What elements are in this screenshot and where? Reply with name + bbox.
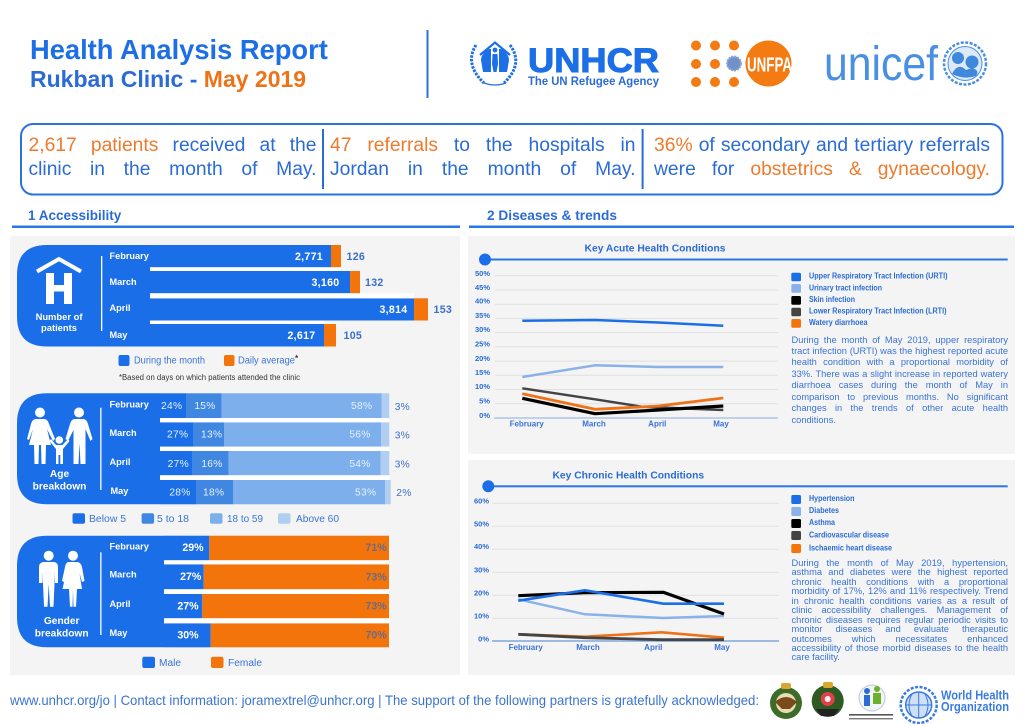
chart: number of patients: 2,617 [287, 330, 316, 342]
chart: key acute health conditions: February [510, 420, 544, 429]
logo: Jordan emblem two [812, 682, 844, 717]
chart: gender breakdown: February [110, 541, 150, 551]
chart: age breakdown: 54% [349, 459, 371, 470]
chart: gender breakdown: May [110, 628, 128, 638]
logo: partner organisation [849, 685, 893, 719]
chart: gender breakdown: breakdown [35, 628, 89, 639]
chart: key chronic health conditions: April [644, 643, 662, 652]
text block: acute analysis: conditions. [792, 415, 836, 425]
chart: gender breakdown: 29% [182, 542, 204, 554]
chart: key chronic health conditions: Key Chronic Health Conditions [552, 471, 704, 482]
chart: key chronic health conditions: 30% [474, 566, 489, 574]
chart: number of patients [17, 245, 452, 346]
legend: gender: Male [159, 658, 181, 669]
text block: chronic analysis [792, 558, 1008, 662]
chart: number of patients: April [110, 303, 130, 313]
chart: key acute health conditions: Key Acute Health Conditions [585, 244, 726, 254]
logo: UNFPA [691, 40, 792, 87]
chart: age breakdown: 18% [203, 488, 224, 499]
chart: key acute health conditions: 15% [475, 368, 490, 377]
chart: gender breakdown: 27% [177, 600, 199, 612]
chart: age breakdown: 24% [161, 401, 182, 412]
title: Health Analysis Report [30, 34, 328, 65]
text block: patients received: clinic in the month of May. [28, 158, 316, 180]
chart: key acute health conditions: 40% [475, 296, 490, 306]
legend: age: 18 to 59 [227, 514, 263, 525]
heading: diseases: 2 Diseases & trends [487, 208, 617, 223]
text block: acute analysis: 33%. There was a slight increase in reported watery [792, 369, 1008, 379]
chart: key acute health conditions: May [713, 420, 729, 429]
chart: age breakdown: 13% [201, 430, 222, 441]
chart: number of patients: 153 [434, 304, 452, 316]
text block: chronic analysis: asthma and diabetes were the highest reported [792, 567, 1008, 577]
chart: gender breakdown: 73% [365, 600, 387, 612]
legend: chronic [791, 494, 892, 553]
legend: age: Above 60 [296, 514, 339, 525]
legend: chronic: Asthma [809, 518, 835, 527]
legend: age: Below 5 [89, 514, 126, 525]
text block: acute analysis: changes in the trends of other acute health [792, 403, 1008, 413]
chart: number of patients: 105 [344, 330, 362, 342]
chart: number of patients: 132 [365, 277, 384, 289]
chart: key acute health conditions: 30% [475, 325, 490, 334]
text block: acute analysis: diarrhoea cases during the month of May in [792, 380, 1008, 390]
chart: gender breakdown: Gender [44, 616, 80, 627]
chart: age breakdown: May [110, 486, 129, 496]
chart: number of patients: February [110, 251, 150, 261]
panel: chronic [468, 460, 1015, 675]
chart: age breakdown: 53% [355, 488, 376, 499]
heading: accessibility: 1 Accessibility [28, 208, 122, 223]
text block: obstetrics share: were for obstetrics & gynaecology. [654, 158, 990, 180]
chart: key acute health conditions: 45% [475, 283, 490, 292]
legend: patients: *Based on days on which patients attended the clinic [119, 373, 300, 382]
chart: age breakdown: 15% [194, 401, 216, 412]
chart: age breakdown: 16% [201, 459, 223, 470]
chart: key acute health conditions: 25% [475, 340, 490, 348]
logo: World Health Organization: World Health [941, 687, 1009, 702]
chart: key chronic health conditions: March [576, 643, 600, 652]
chart: age breakdown: 3% [395, 430, 410, 442]
logo: UNFPA: UNFPA [747, 55, 792, 77]
chart: key acute health conditions: 20% [475, 354, 490, 363]
chart: key chronic health conditions: 50% [474, 520, 489, 528]
callout: key figures box [21, 124, 1002, 194]
chart: number of patients: 126 [346, 251, 365, 263]
text block: chronic analysis: morbidity of 17%, 12% and 11% respectively. Trend [792, 586, 1008, 596]
text block: acute analysis: comparison to previous months. No significant [792, 392, 1008, 402]
chart: number of patients: 3,814 [379, 304, 408, 316]
legend: patients [118, 354, 300, 382]
legend: gender: Female [228, 658, 262, 669]
chart: number of patients: patients [41, 322, 77, 333]
legend: acute: Urinary tract infection [809, 284, 882, 292]
legend: gender [142, 657, 262, 669]
chart: age breakdown: 3% [395, 460, 410, 470]
legend: acute: Upper Respiratory Tract Infection (URTI) [809, 272, 948, 280]
text block: obstetrics share [654, 134, 990, 180]
chart: age breakdown: 27% [167, 430, 188, 441]
text block: chronic analysis: During the month of May 2019, hypertension, [792, 558, 1008, 568]
text block: chronic analysis: care facility. [792, 652, 840, 662]
legend: acute [791, 272, 948, 328]
legend: age [72, 513, 339, 525]
text block: obstetrics share: 36% of secondary and tertiary referrals [654, 134, 990, 156]
chart: age breakdown: March [110, 428, 137, 438]
logo: UNHCR: UNHCR [528, 42, 659, 80]
logo: unicef: unicef [824, 38, 939, 91]
chart: age breakdown: 56% [349, 430, 371, 441]
chart: age breakdown: 2% [396, 488, 412, 499]
chart: key acute health conditions: April [648, 420, 666, 429]
legend: chronic: Cardiovascular disease [809, 531, 889, 540]
text block: acute analysis: tract infection (URTI) was the highest reported acute [792, 346, 1008, 356]
chart: key acute health conditions: 5% [479, 396, 490, 406]
chart: key chronic health conditions: 40% [474, 542, 489, 551]
chart: gender breakdown: 73% [365, 572, 387, 584]
icon: house [37, 259, 81, 304]
chart: gender breakdown: 30% [177, 630, 199, 642]
chart: key acute health conditions: 10% [475, 382, 490, 391]
footer contact text: www.unhcr.org/jo | Contact information: joramextrel@unhcr.org | The support of the following partners is gratefully acknowledged: [9, 692, 759, 708]
text block: chronic analysis: chronic diseases requires regular periodic visits to [792, 615, 1008, 625]
chart: gender breakdown: April [110, 599, 130, 609]
logo: Jordan emblem one [770, 683, 802, 719]
logo: World Health Organization [901, 687, 1009, 723]
legend: patients: Daily average [238, 356, 295, 366]
chart: gender breakdown: March [110, 570, 137, 580]
title: Rukban Clinic - May 2019 [30, 66, 306, 92]
icon: family [27, 408, 92, 464]
chart: age breakdown: 3% [395, 402, 410, 413]
legend: acute: Lower Respiratory Tract Infection (LRTI) [809, 306, 947, 316]
legend: acute: Watery diarrhoea [809, 318, 868, 327]
chart: key acute health conditions: 50% [475, 269, 490, 278]
text block: chronic analysis: in chronic health conditions varies as a result of [792, 596, 1008, 606]
text block: chronic analysis: outcomes which necessitates enhanced [792, 634, 1008, 644]
legend: patients: * [295, 354, 299, 363]
chart: age breakdown: February [110, 400, 150, 410]
chart: age breakdown [17, 393, 412, 504]
text block: acute analysis: During the month of May 2019, upper respiratory [792, 334, 1008, 344]
text block: patients received [28, 134, 317, 180]
text block: chronic analysis: chronic health conditions with a proportional [792, 577, 1008, 587]
legend: age: 5 to 18 [157, 514, 189, 525]
chart: number of patients: March [110, 277, 137, 287]
chart: key acute health conditions: March [582, 420, 606, 429]
text block: chronic analysis: monitor diseases and evaluate therapeutic [792, 624, 1008, 634]
chart: age breakdown: 27% [168, 459, 189, 470]
chart: age breakdown: 58% [351, 401, 372, 412]
chart: key chronic health conditions: May [714, 643, 730, 652]
text block: referrals: 47 referrals to the hospitals in [330, 134, 636, 156]
chart: number of patients: Number of [36, 311, 83, 322]
text block: acute analysis: health condition with a proportional morbidity of [792, 357, 1008, 367]
logo: World Health Organization: Organization [941, 699, 1009, 714]
logo: UNHCR [472, 42, 660, 88]
chart: number of patients: May [110, 330, 128, 340]
chart: age breakdown: breakdown [33, 481, 86, 492]
legend: chronic: Diabetes [809, 506, 839, 515]
chart: key chronic health conditions: 10% [474, 612, 489, 620]
chart: age breakdown: April [110, 457, 130, 467]
text block: referrals [330, 134, 636, 180]
chart: gender breakdown: 71% [365, 542, 387, 554]
chart: gender breakdown: 27% [180, 571, 202, 583]
chart: number of patients: 2,771 [295, 251, 323, 263]
text block: chronic analysis: accessibility of those morbid diseases to the health [792, 643, 1008, 653]
legend: chronic: Hypertension [809, 494, 855, 503]
chart: age breakdown: 28% [169, 488, 191, 499]
title [30, 34, 328, 92]
chart: key chronic health conditions [474, 471, 1008, 652]
legend: acute: Skin infection [809, 295, 855, 304]
chart: number of patients: 3,160 [311, 277, 340, 289]
text block: acute analysis [792, 334, 1008, 425]
chart: key acute health conditions [475, 244, 1008, 429]
chart: key chronic health conditions: February [509, 643, 543, 652]
chart: key chronic health conditions: 0% [478, 634, 489, 644]
text block: patients received: 2,617 patients received at the [28, 134, 317, 156]
logo: UNHCR: The UN Refugee Agency [528, 76, 660, 88]
chart: gender breakdown [17, 536, 389, 647]
legend: chronic: Ischaemic heart disease [809, 544, 892, 553]
legend: patients: During the month [134, 356, 205, 366]
text block: referrals: Jordan in the month of May. [330, 158, 636, 180]
chart: key chronic health conditions: 20% [474, 588, 489, 598]
chart: age breakdown: Age [50, 469, 69, 480]
chart: gender breakdown: 70% [365, 630, 387, 642]
chart: key chronic health conditions: 60% [474, 496, 489, 506]
panel: acute [468, 236, 1015, 454]
chart: key acute health conditions: 0% [479, 411, 490, 420]
chart: key acute health conditions: 35% [475, 311, 490, 320]
panel: accessibility [10, 236, 460, 675]
text block: chronic analysis: clinic accessibility challenges. Management of [792, 605, 1008, 615]
icon: man and woman [39, 551, 84, 607]
